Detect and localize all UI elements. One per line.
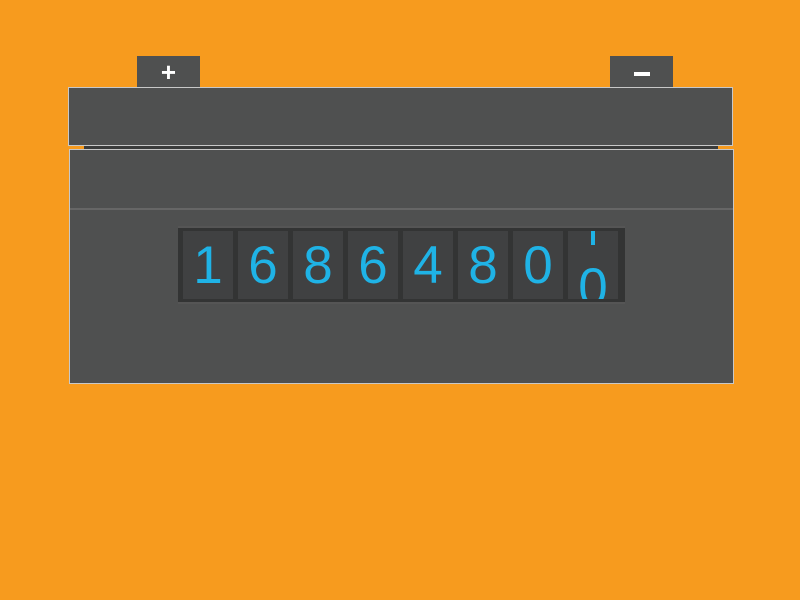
counter: 0 (523, 236, 553, 295)
terminal: minus (610, 56, 673, 88)
counter (178, 226, 625, 304)
counter: 8 (303, 236, 333, 295)
counter: 6 (358, 236, 388, 295)
counter: 6 (248, 236, 278, 295)
battery lid (68, 87, 733, 146)
counter: 1 (193, 236, 223, 295)
counter: 8 (468, 236, 498, 295)
terminal: plus (137, 56, 200, 88)
battery body (69, 149, 734, 384)
counter: 4 (413, 236, 443, 295)
terminal: plus: + (161, 57, 176, 87)
